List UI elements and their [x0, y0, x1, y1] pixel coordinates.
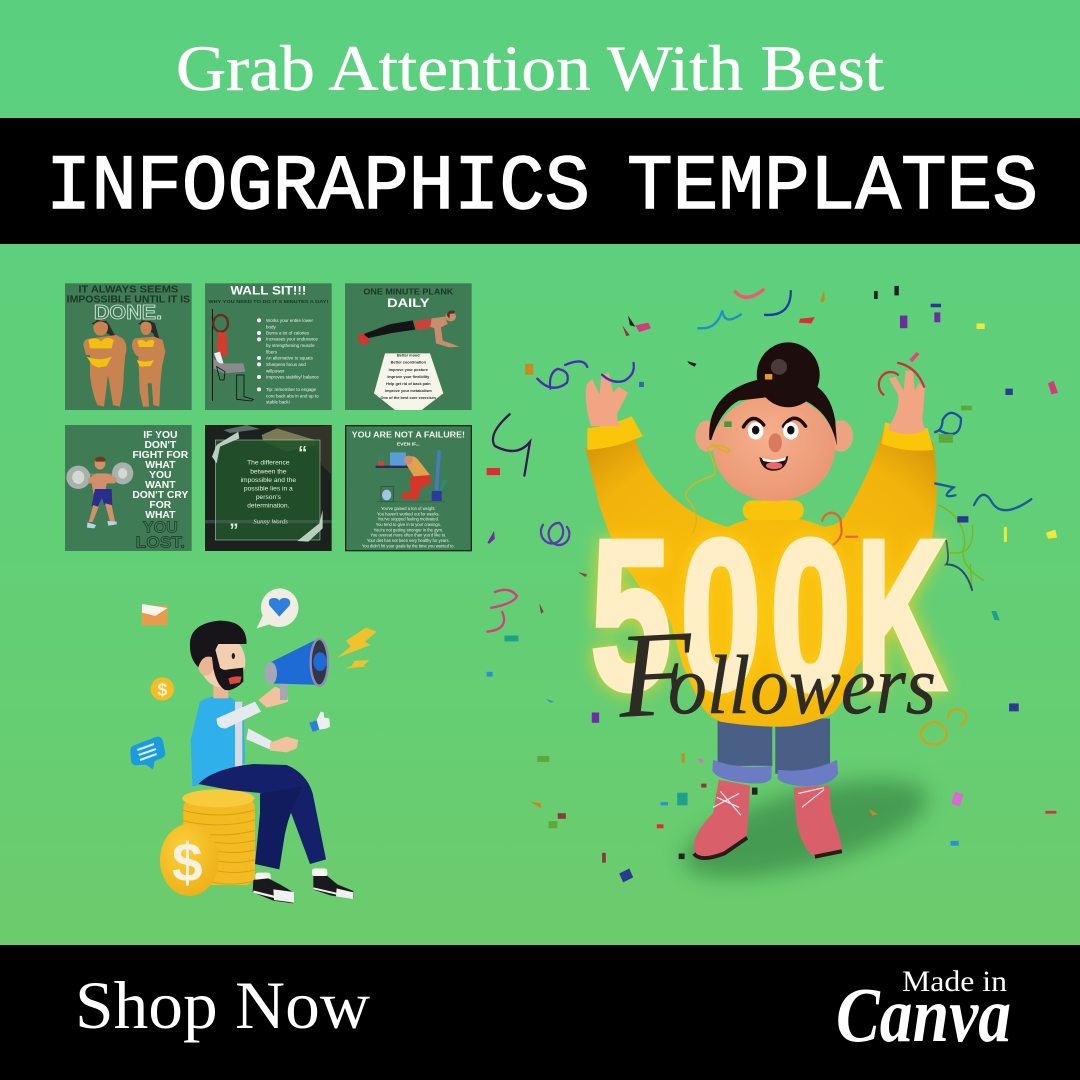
500K headline: K — [857, 496, 945, 733]
thumbnail: if you don't fight: LOST. — [136, 535, 185, 552]
body text: You've stopped feeling motivated. — [378, 517, 439, 522]
thumbnail: quote on photo — [205, 425, 332, 551]
bullet list: Improves stability/ balance — [266, 375, 319, 380]
icon: dollar coin — [151, 677, 174, 701]
thumbnail: it always seems impossible: DONE. — [94, 302, 162, 324]
bullet list: Works your entire lower — [266, 318, 314, 323]
benefits text: One of the best core exercises — [381, 396, 436, 400]
bullet list — [257, 318, 319, 405]
icon: thumbs up — [309, 712, 330, 732]
shoes — [253, 868, 354, 903]
thumbnail: if you don't fight — [65, 425, 192, 552]
bullet list: fibers — [266, 349, 278, 354]
coin stack: $ — [172, 832, 203, 894]
bullet list: Burns a lot of calories — [266, 331, 310, 336]
body text: You overeat more often than you'd like to. — [370, 533, 446, 538]
thumbnail: if you don't fight: WANT — [145, 480, 176, 491]
figure: plank — [357, 310, 459, 347]
body text: You're not getting stronger in the gym. — [374, 527, 443, 532]
thumbnail: you are not a failure: YOU ARE NOT A FAILURE! — [352, 431, 465, 440]
thumbnail: if you don't fight: FIGHT FOR — [133, 450, 189, 461]
megaphone — [264, 639, 328, 700]
coin stack — [160, 789, 257, 896]
banner title — [46, 144, 1038, 232]
figure: weightlifter — [66, 457, 133, 528]
thumbnail: it always seems impossible — [65, 283, 192, 410]
illustration: celebrating character with confetti — [487, 286, 1058, 898]
shirt placket — [235, 702, 242, 767]
quote text — [241, 459, 296, 510]
thumbnail: it always seems impossible: IMPOSSIBLE UNTIL IT IS — [67, 295, 191, 306]
arms — [217, 687, 298, 752]
benefits text — [381, 354, 436, 400]
man's head — [190, 621, 247, 698]
character head — [695, 342, 853, 501]
quote card — [215, 440, 320, 540]
body text: You didn't hit your goals by the time you wanted to. — [362, 544, 455, 549]
banner title: TEMPLATES — [627, 144, 1038, 232]
benefits text: Improve your flexibility — [387, 375, 430, 379]
benefits text: Improve your posture — [389, 368, 428, 372]
trousers — [198, 764, 326, 869]
bullet list: stable back! — [266, 400, 290, 405]
body text: You've gained a ton of weight. — [381, 506, 436, 511]
bullet list: by strengthening muscle — [266, 343, 315, 348]
thumbnail: if you don't fight: FOR — [149, 500, 172, 511]
Followers script: F — [613, 605, 697, 744]
quote text: determination. — [247, 503, 290, 510]
made in canva badge: Canva — [836, 971, 1011, 1058]
thumbnail: if you don't fight: WHAT — [145, 510, 176, 521]
icon: lightning bolts — [337, 628, 377, 669]
bullet list: An alternative to squats — [266, 356, 314, 361]
thumbnail: quote on photo: “ — [298, 442, 307, 463]
figure: wall sit woman — [213, 315, 253, 401]
bullet list: core back abs in and up to — [266, 393, 319, 398]
sweater — [585, 426, 937, 727]
500K glow: 500 — [591, 497, 851, 734]
bullet list: willpower — [266, 368, 285, 373]
figure: tired person at desk — [376, 450, 447, 502]
benefits text: Better coordination — [391, 361, 427, 365]
boots — [694, 780, 842, 859]
500K glow: K — [857, 496, 945, 733]
thumbnail: if you don't fight: IF YOU — [143, 430, 177, 441]
shop now: Shop Now — [75, 967, 370, 1043]
icon: chat bubble — [130, 737, 165, 769]
bullet list: Tip: remember to engage — [266, 387, 317, 392]
Followers script: ollowers — [668, 639, 936, 732]
Followers script — [613, 605, 936, 744]
thumbnail: quote on photo: ” — [229, 520, 239, 541]
benefits text: Improve your metabolism — [385, 389, 432, 393]
banner title: INFOGRAPHICS — [46, 144, 590, 232]
body text: Your diet has not been very healthy for years. — [367, 538, 450, 543]
cuffs and collar — [587, 416, 933, 520]
bullet list: Increases your endurance — [266, 337, 318, 342]
thumbnail: one minute plank: DAILY — [387, 296, 430, 310]
headline: Grab Attention With Best: Grab Attention With Best — [176, 33, 884, 105]
thumbnail: wall sit: WHY YOU NEED TO DO IT 5 MINUTES A DAY! — [208, 299, 329, 305]
quote text: possible lies in a — [244, 486, 293, 493]
thumbnail: quote on photo: Sunny Words — [253, 518, 288, 525]
500K headline: 500 — [591, 497, 851, 734]
thumbnail: it always seems impossible: IT ALWAYS SEEMS — [78, 285, 179, 296]
illustration: man with megaphone on coins — [130, 588, 377, 903]
made in canva badge: Made in — [902, 965, 1007, 998]
thumbnail: one minute plank — [345, 283, 472, 410]
trousers — [712, 718, 838, 786]
thumbnail: one minute plank: ONE MINUTE PLANK — [363, 286, 453, 296]
panel: template thumbnails grid — [65, 283, 472, 552]
confetti — [487, 286, 1058, 882]
bullet list: Sharpens focus and — [266, 362, 306, 367]
figure: woman after — [132, 320, 165, 407]
body text: You haven't worked out for weeks. — [377, 511, 440, 516]
body text: You tend to give in to your cravings. — [376, 522, 441, 527]
thumbnail: wall sit: WALL SIT!!! — [230, 284, 306, 298]
footer bar — [0, 945, 1080, 1080]
thumbnail: if you don't fight: DON'T — [144, 440, 177, 451]
body text — [362, 506, 455, 549]
shirt — [191, 696, 245, 787]
banner: infographics templates — [0, 118, 1080, 244]
thumbnail: if you don't fight: WHAT — [145, 460, 176, 471]
benefits box — [374, 353, 443, 410]
thumbnail: you are not a failure — [346, 426, 471, 551]
thumbnail: if you don't fight: YOU — [149, 470, 172, 481]
wall line — [211, 309, 214, 401]
quote text: impossible and the — [241, 477, 296, 484]
hands — [586, 371, 926, 434]
thumbnail: if you don't fight: DON'T CRY — [132, 490, 188, 501]
icon: heart speech bubble — [257, 588, 298, 628]
icon: envelope — [142, 604, 168, 625]
ground shadow — [675, 760, 936, 898]
icon: dollar coin: $ — [157, 680, 167, 700]
quote text: between the — [250, 468, 287, 475]
thumbnail: if you don't fight: YOU — [143, 519, 178, 536]
figure: woman before — [83, 320, 127, 407]
benefits text: Help get rid of back pain — [386, 382, 431, 386]
benefits text: Better mood — [397, 354, 420, 358]
bullet list: body — [266, 324, 276, 329]
thumbnail: you are not a failure: EVEN IF... — [397, 442, 420, 448]
quote text: person's — [256, 494, 281, 501]
thumbnail: wall sit — [205, 283, 332, 410]
quote text: The difference — [247, 459, 290, 466]
